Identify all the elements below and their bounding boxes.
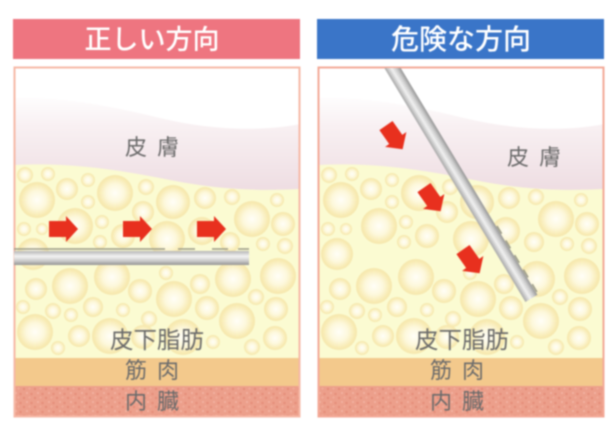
label: subcutaneous fat: 皮下脂肪 xyxy=(110,327,204,353)
label: skin: 皮 膚 xyxy=(125,135,179,160)
label: subcutaneous fat: 皮下脂肪 xyxy=(415,327,509,353)
header: correct direction: 正しい方向 xyxy=(84,25,220,55)
label: skin: 皮 膚 xyxy=(507,145,561,170)
label: muscle: 筋 肉 xyxy=(125,358,179,383)
diagram: dangerous needle direction xyxy=(318,56,604,417)
header: correct direction xyxy=(13,19,300,59)
panel: correct direction xyxy=(13,19,300,417)
needle: horizontal xyxy=(14,249,249,265)
needle: diagonal xyxy=(381,56,540,302)
arrows: needle direction xyxy=(375,118,490,281)
label: organs: 内 臓 xyxy=(125,389,179,414)
arrows: needle direction xyxy=(49,216,226,242)
label: organs: 内 臓 xyxy=(430,389,484,414)
header: dangerous direction xyxy=(317,19,604,59)
panel: dangerous direction xyxy=(317,19,604,417)
header: dangerous direction: 危険な方向 xyxy=(391,24,531,55)
label: muscle: 筋 肉 xyxy=(430,358,484,383)
diagram: correct needle direction xyxy=(14,67,300,417)
